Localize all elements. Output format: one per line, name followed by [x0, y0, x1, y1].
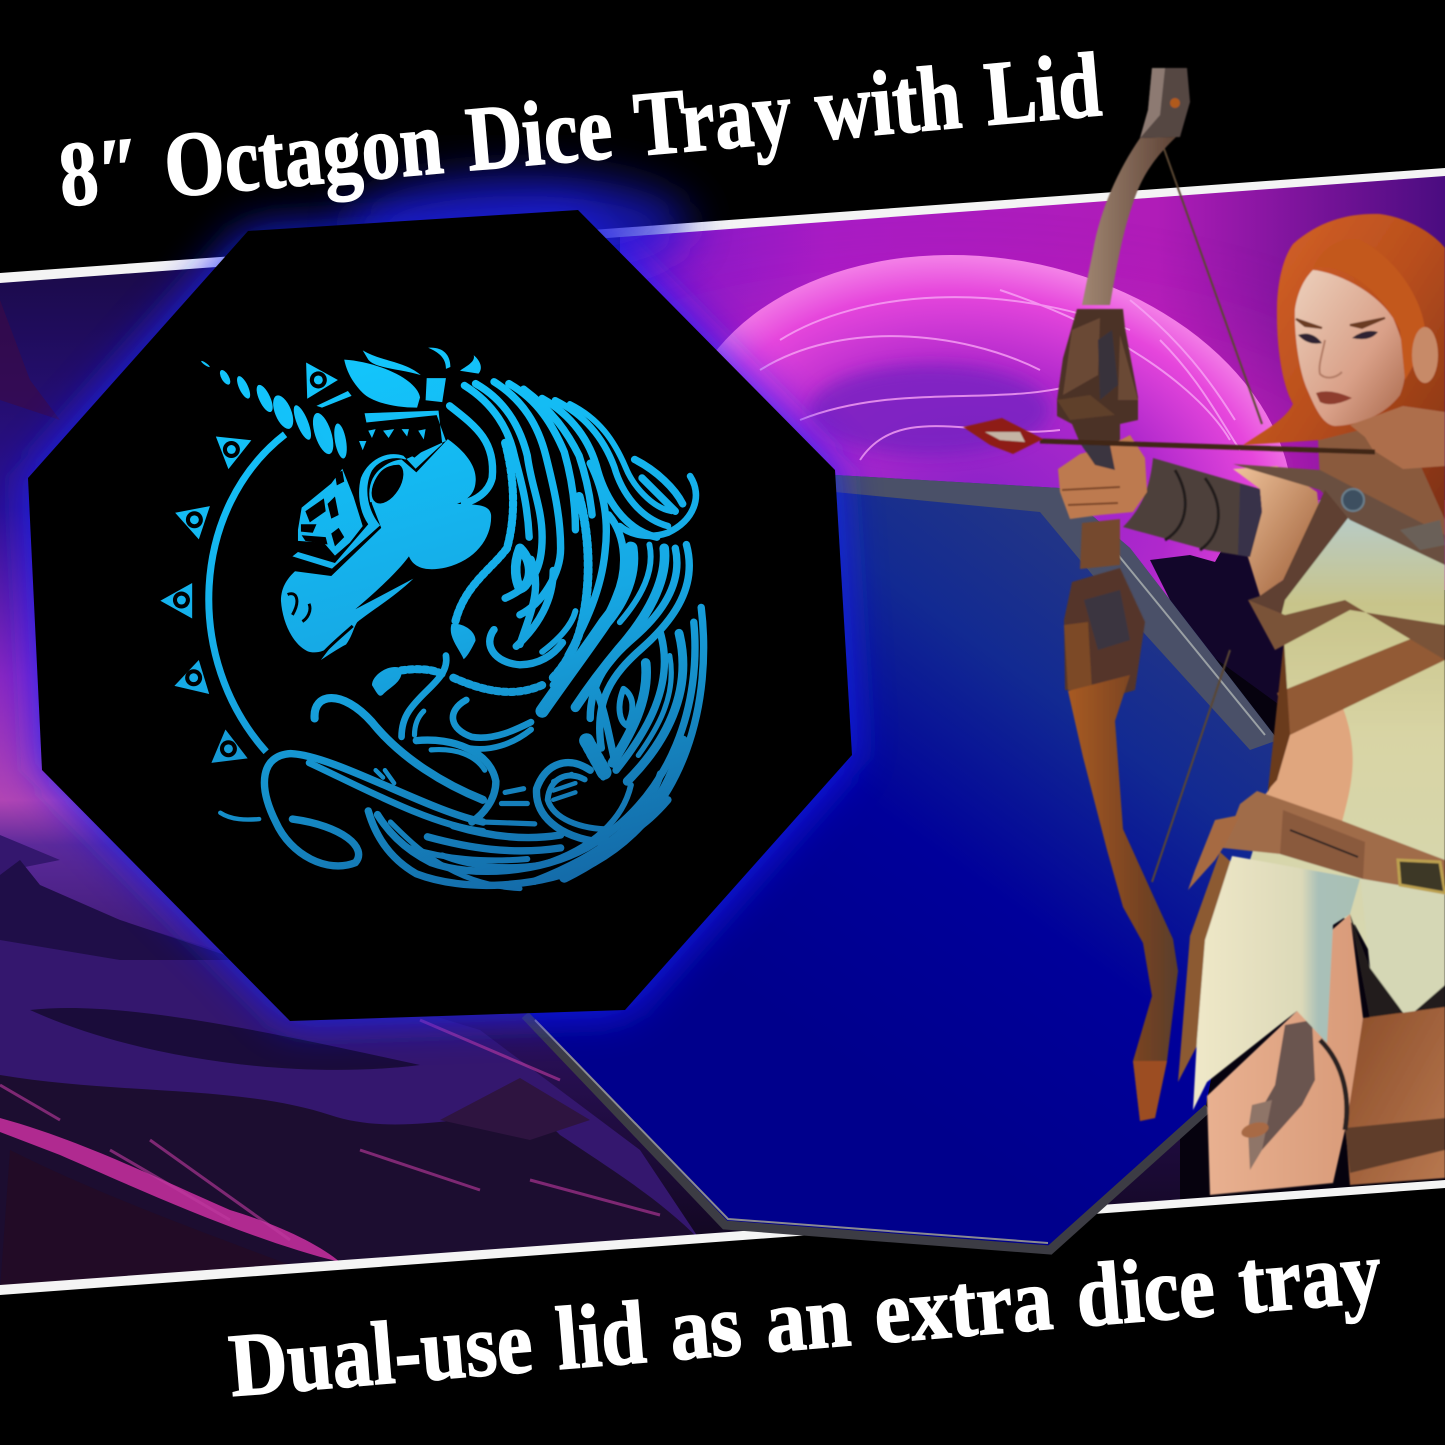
bow — [1057, 68, 1190, 1121]
eyes — [1298, 331, 1378, 344]
arc — [209, 434, 285, 752]
skin gap and left thigh — [1207, 914, 1363, 1195]
head — [281, 439, 491, 660]
bow hand — [1058, 435, 1147, 519]
octagon dice tray — [28, 210, 852, 1021]
archer figure — [963, 68, 1445, 1195]
waist skin — [1265, 690, 1353, 830]
right thigh — [1345, 1007, 1445, 1185]
bridle — [292, 411, 446, 569]
bowstring — [1152, 146, 1262, 882]
nostril and mouth — [288, 594, 353, 653]
arrow — [963, 418, 1375, 454]
title: 8″ Octagon Dice Tray with Lid — [55, 33, 1105, 226]
mane strands — [220, 382, 704, 889]
ear — [344, 360, 420, 408]
lid tray, blue felt with grey rim — [525, 475, 1278, 1250]
eyebrows — [1296, 318, 1385, 328]
skirt — [1193, 856, 1360, 1110]
neck — [1317, 410, 1445, 545]
draw hand — [1350, 406, 1445, 469]
right thigh strap — [1345, 1118, 1445, 1173]
pouch at hip — [1188, 815, 1240, 890]
face — [1295, 239, 1438, 426]
hair back — [1243, 214, 1445, 520]
white border line: top — [0, 168, 1445, 283]
upper arm — [1233, 466, 1320, 596]
dark shorts — [1350, 914, 1445, 1020]
leather harness — [1233, 464, 1445, 660]
rope ornaments — [402, 443, 605, 774]
white border line: bottom — [0, 1180, 1445, 1295]
lips — [1316, 391, 1352, 404]
panel: fantasy landscape band — [0, 170, 1445, 1300]
brown waist strap — [1277, 625, 1445, 735]
eye — [365, 458, 410, 509]
unicorn emblem — [160, 348, 704, 889]
brown drape — [1178, 852, 1240, 1082]
horn — [201, 360, 352, 459]
torso — [1250, 500, 1445, 1018]
belt — [1223, 791, 1445, 893]
belt buckle — [1398, 860, 1445, 893]
pointed front panel — [1360, 875, 1445, 1018]
thigh pouch straps — [1240, 1020, 1347, 1170]
bracer — [1123, 458, 1262, 557]
blue glow behind octagon — [28, 210, 852, 1021]
top blue glow — [350, 175, 690, 275]
nose — [1319, 340, 1342, 378]
ring of triangles — [160, 363, 338, 763]
